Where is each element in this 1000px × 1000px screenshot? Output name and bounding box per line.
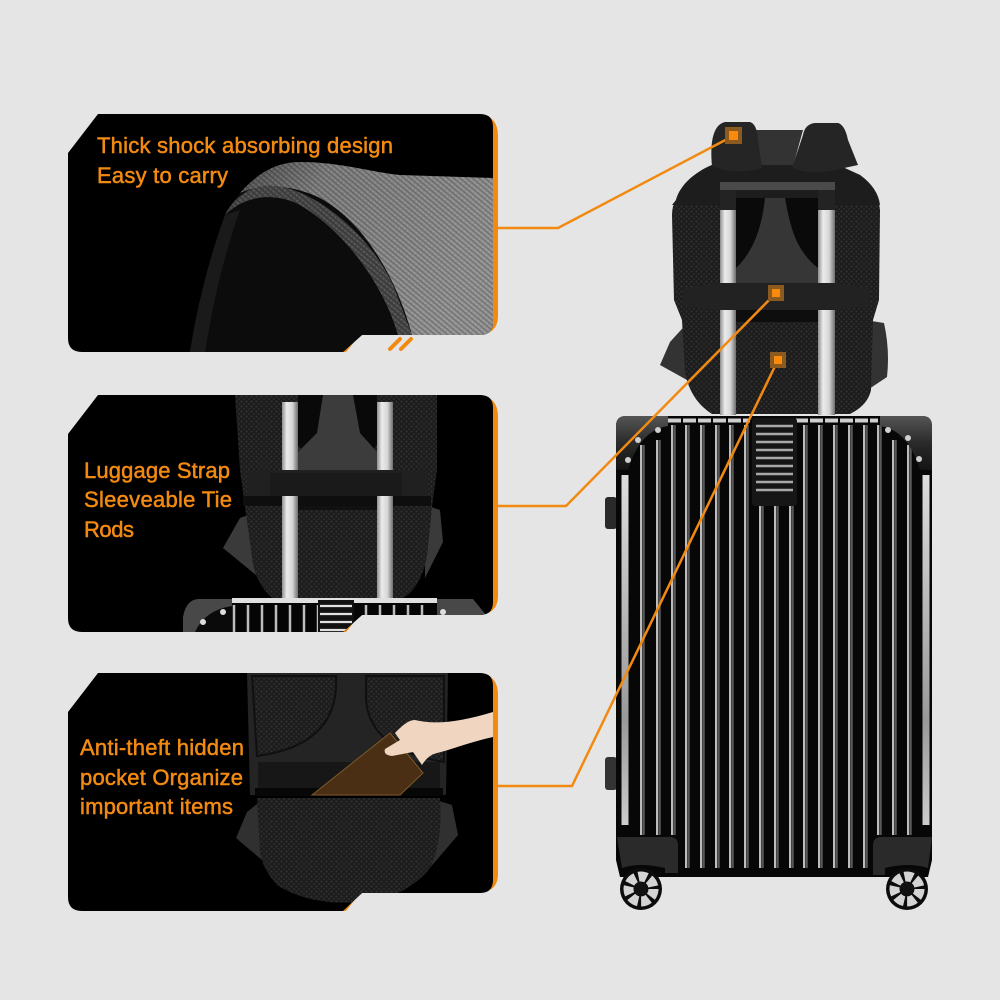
panel: luggage strap	[68, 395, 498, 640]
callout line: luggage strap	[498, 285, 784, 506]
wallet card	[312, 733, 423, 795]
back panel	[736, 198, 818, 283]
shell	[616, 416, 932, 877]
strap fabric close-up	[190, 162, 493, 352]
label text: Rods	[84, 517, 134, 542]
suitcase	[605, 416, 932, 910]
callout line: hidden pocket	[498, 352, 786, 786]
wheel housings	[617, 837, 678, 873]
backpack and trolley close-up	[183, 395, 490, 640]
label text: pocket Organize	[80, 765, 243, 790]
top grab handle	[752, 418, 797, 506]
hand	[385, 712, 493, 765]
trolley rods	[720, 210, 835, 415]
heading text: Thick shock absorbing design	[97, 133, 393, 158]
infographic canvas	[68, 114, 932, 911]
label text: Luggage Strap	[84, 458, 230, 483]
label text: important items	[80, 794, 233, 819]
body	[672, 165, 880, 414]
top rail	[668, 418, 878, 422]
label text: Anti-theft hidden	[80, 735, 244, 760]
backpack on trolley	[660, 122, 888, 415]
wheel right	[886, 868, 928, 910]
heading text	[97, 133, 393, 188]
label text	[84, 458, 232, 542]
backpack pocket close-up	[236, 673, 493, 903]
back handle	[755, 130, 803, 170]
callout line: shoulder strap	[498, 127, 742, 228]
luggage strap	[683, 283, 870, 310]
heading text: Easy to carry	[97, 163, 228, 188]
ribs	[625, 425, 926, 868]
label text	[80, 735, 244, 819]
panel: anti-theft pocket	[68, 673, 498, 911]
side handle	[605, 757, 617, 790]
decorative slashes	[390, 339, 411, 349]
shoulder straps	[711, 122, 762, 172]
trolley handle	[720, 182, 835, 190]
label text: Sleeveable Tie	[84, 487, 232, 512]
top corners	[616, 416, 668, 470]
wheel left	[620, 868, 662, 910]
side straps	[660, 320, 888, 393]
panel: shock absorbing strap	[68, 114, 498, 352]
